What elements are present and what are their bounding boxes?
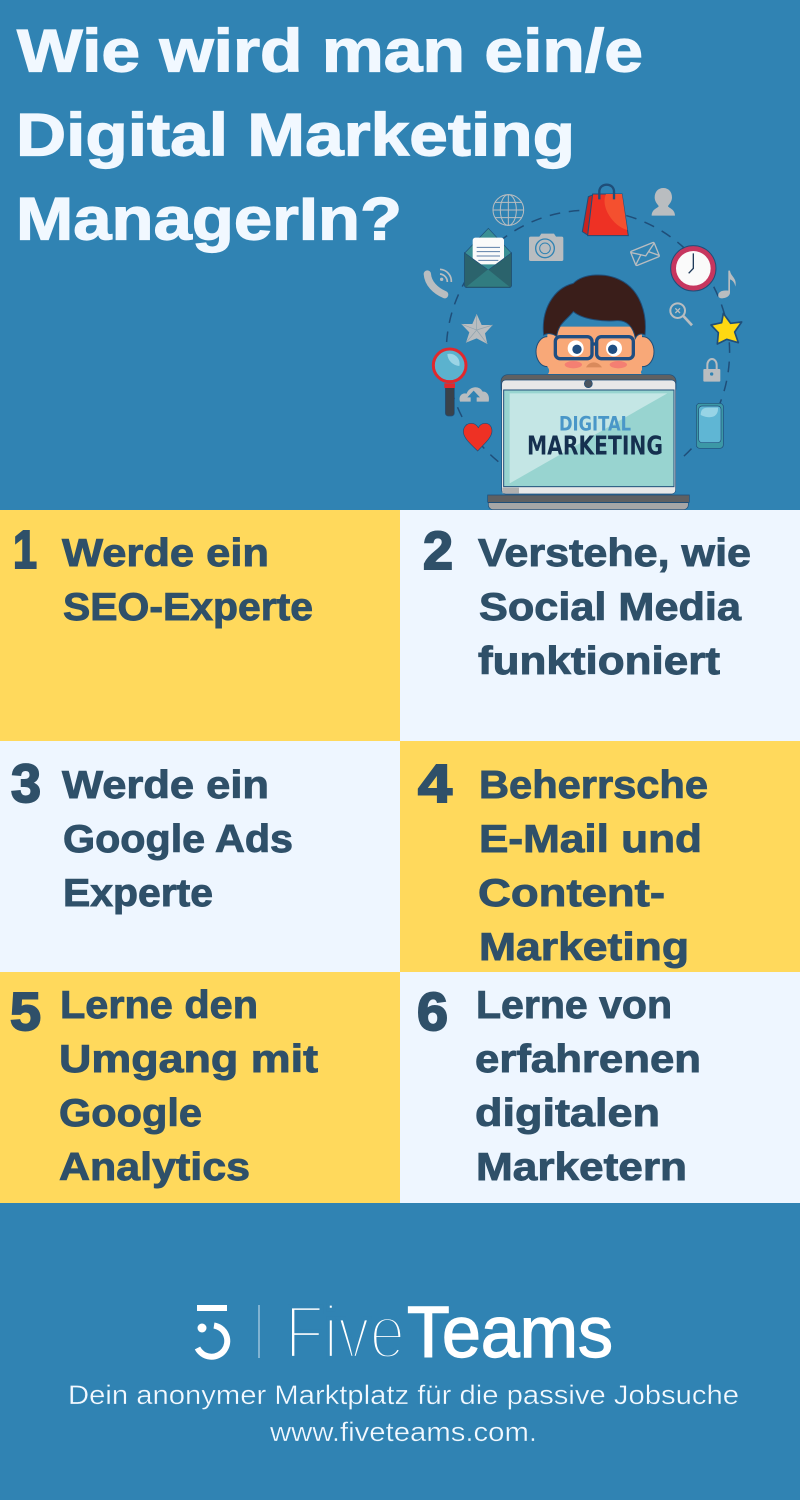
text 1 [62,532,313,629]
icon: smartphone [696,403,723,448]
text 1: SEO-Experte [63,586,313,629]
glasses [555,337,633,359]
text 5: Umgang mit [59,1038,318,1081]
title: ManagerIn? [16,186,402,252]
icon: camera [529,234,563,261]
screen text: DIGITAL [559,413,631,436]
icon: telephone [427,269,451,295]
tagline: www.fiveteams.com. [269,1417,537,1447]
text 6: Marketern [476,1146,687,1189]
text 3: Experte [63,872,213,915]
icon: person [652,188,675,216]
text 3: Google Ads [63,818,293,861]
icon: globe [493,195,524,225]
text 5: Lerne den [60,984,258,1027]
icon: lock [703,359,720,382]
text 2 [478,532,751,683]
text 3: Werde ein [62,764,269,807]
text 6: Lerne von [476,984,672,1027]
text 3 [62,764,293,915]
text 6: digitalen [475,1092,660,1135]
text 4: Beherrsche [479,764,708,807]
wordmark [285,1290,613,1374]
screen text: MARKETING [527,431,663,461]
cheeks and nose [565,361,627,368]
number 1: 1 [13,520,37,580]
icon: yellow star [711,313,742,344]
panel 6: experienced marketers [400,972,800,1203]
icon: music note [718,271,736,298]
icon: open envelope [464,228,512,288]
laptop [488,375,689,510]
icon: cloud upload [460,387,489,402]
logo: FiveTeams [197,1290,613,1374]
number 6: 6 [417,982,448,1042]
icon: shopping bag [582,185,628,236]
icon: grey star [461,314,493,344]
text 5: Google [59,1092,202,1135]
title: Wie wird man ein/e [17,18,643,84]
text 5: Analytics [59,1146,250,1189]
hair [543,275,645,338]
text 4: Content- [478,872,665,915]
number 3: 3 [11,754,41,814]
wordmark: Teams [407,1293,613,1373]
tagline [68,1380,739,1447]
title: Digital Marketing [16,102,575,168]
panel 4: E-Mail and Content [400,741,800,972]
number 5: 5 [10,982,41,1042]
face [547,327,642,374]
ears [536,337,654,367]
panel 1: SEO [0,510,400,741]
number 2: 2 [423,521,453,581]
text 4 [478,764,708,969]
tagline: Dein anonymer Marktplatz für die passive Jobsuche [68,1380,739,1410]
screen text [527,413,663,461]
icon: clock [671,246,716,291]
text 5 [59,984,318,1189]
icon: red magnifier [433,349,466,416]
icon: heart [463,423,492,451]
icon: small magnifier [670,303,692,325]
text 6 [475,984,701,1189]
panel 2: Social Media [400,510,800,741]
text 2: Verstehe, wie [478,532,751,575]
text 4: E-Mail und [479,818,702,861]
text 1: Werde ein [62,532,269,575]
logo mark [197,1308,227,1357]
text 2: Social Media [479,586,741,629]
panel 3: Google Ads [0,741,400,972]
text 2: funktioniert [478,640,720,683]
wordmark: Five [285,1290,405,1374]
number 4: 4 [418,754,452,814]
illustration: digital marketing character with laptop and icons [427,185,742,510]
icon: mail small [630,242,660,266]
character [536,275,654,374]
dashed arc around character [446,210,730,462]
text 6: erfahrenen [475,1038,701,1081]
title [16,18,643,252]
text 4: Marketing [479,926,689,969]
panel 5: Google Analytics [0,972,400,1203]
